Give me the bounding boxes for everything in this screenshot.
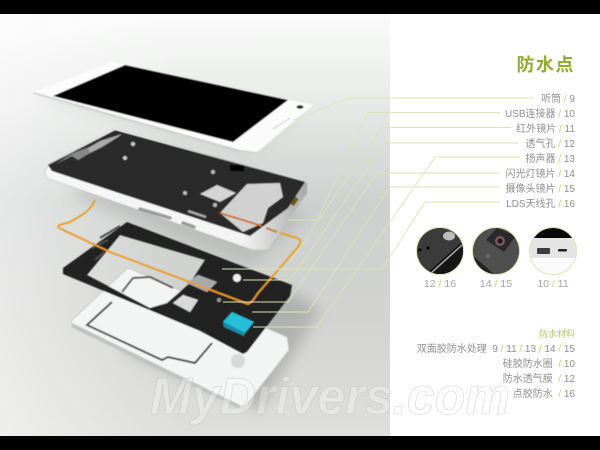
top black bar <box>0 0 600 14</box>
orange gasket: seen through frame <box>220 213 277 232</box>
materials list: 双面胶防水处理 9 / 11 / 13 / 14 / 15 <box>417 342 575 355</box>
middle frame <box>63 222 292 354</box>
watermark: MyDrivers.com <box>150 368 510 426</box>
component: cyan speaker <box>223 312 254 336</box>
panel: white info column <box>390 14 600 436</box>
icon: detail photo 12/16 <box>416 227 464 275</box>
heading: waterproof materials: 防水材料 <box>539 328 575 339</box>
icon: detail photo 14/15 <box>472 227 520 275</box>
title: 防水点 <box>516 54 575 75</box>
front panel with screen <box>33 62 313 153</box>
callout list: waterproof points: 听筒 / 9 <box>541 92 575 105</box>
middle chassis with white edge <box>45 128 307 250</box>
bottom black bar <box>0 436 600 450</box>
icon: detail photo 10/11 <box>529 227 577 276</box>
callout list: waterproof points: 闪光灯镜片 / 14 <box>506 167 575 180</box>
materials list: 硅胶防水圈 / 10 <box>503 357 575 370</box>
materials list <box>417 342 575 400</box>
callout list: waterproof points: 摄像头镜片 / 15 <box>506 182 575 195</box>
callout list: waterproof points: USB连接器 / 10 <box>505 107 575 120</box>
callout list: waterproof points <box>505 92 575 210</box>
detail photo labels: 10 / 11 <box>537 278 569 290</box>
panel: grey photo background <box>0 14 390 436</box>
materials list: 点胶防水 / 16 <box>513 387 575 400</box>
callout list: waterproof points: LDS天线孔 / 16 <box>506 197 575 210</box>
orange gasket: lower section <box>58 200 301 304</box>
materials list: 防水透气膜 / 12 <box>503 372 575 385</box>
detail photo labels: 12 / 16 <box>424 278 456 290</box>
leader lines <box>222 98 534 327</box>
callout list: waterproof points: 扬声器 / 13 <box>526 152 575 165</box>
callout list: waterproof points: 透气孔 / 12 <box>526 137 575 150</box>
back cover <box>72 268 289 409</box>
detail photo labels: 14 / 15 <box>480 278 512 290</box>
detail photo labels <box>424 278 569 290</box>
callout list: waterproof points: 红外镜片 / 11 <box>516 122 575 135</box>
exploded phone illustration <box>33 62 313 409</box>
